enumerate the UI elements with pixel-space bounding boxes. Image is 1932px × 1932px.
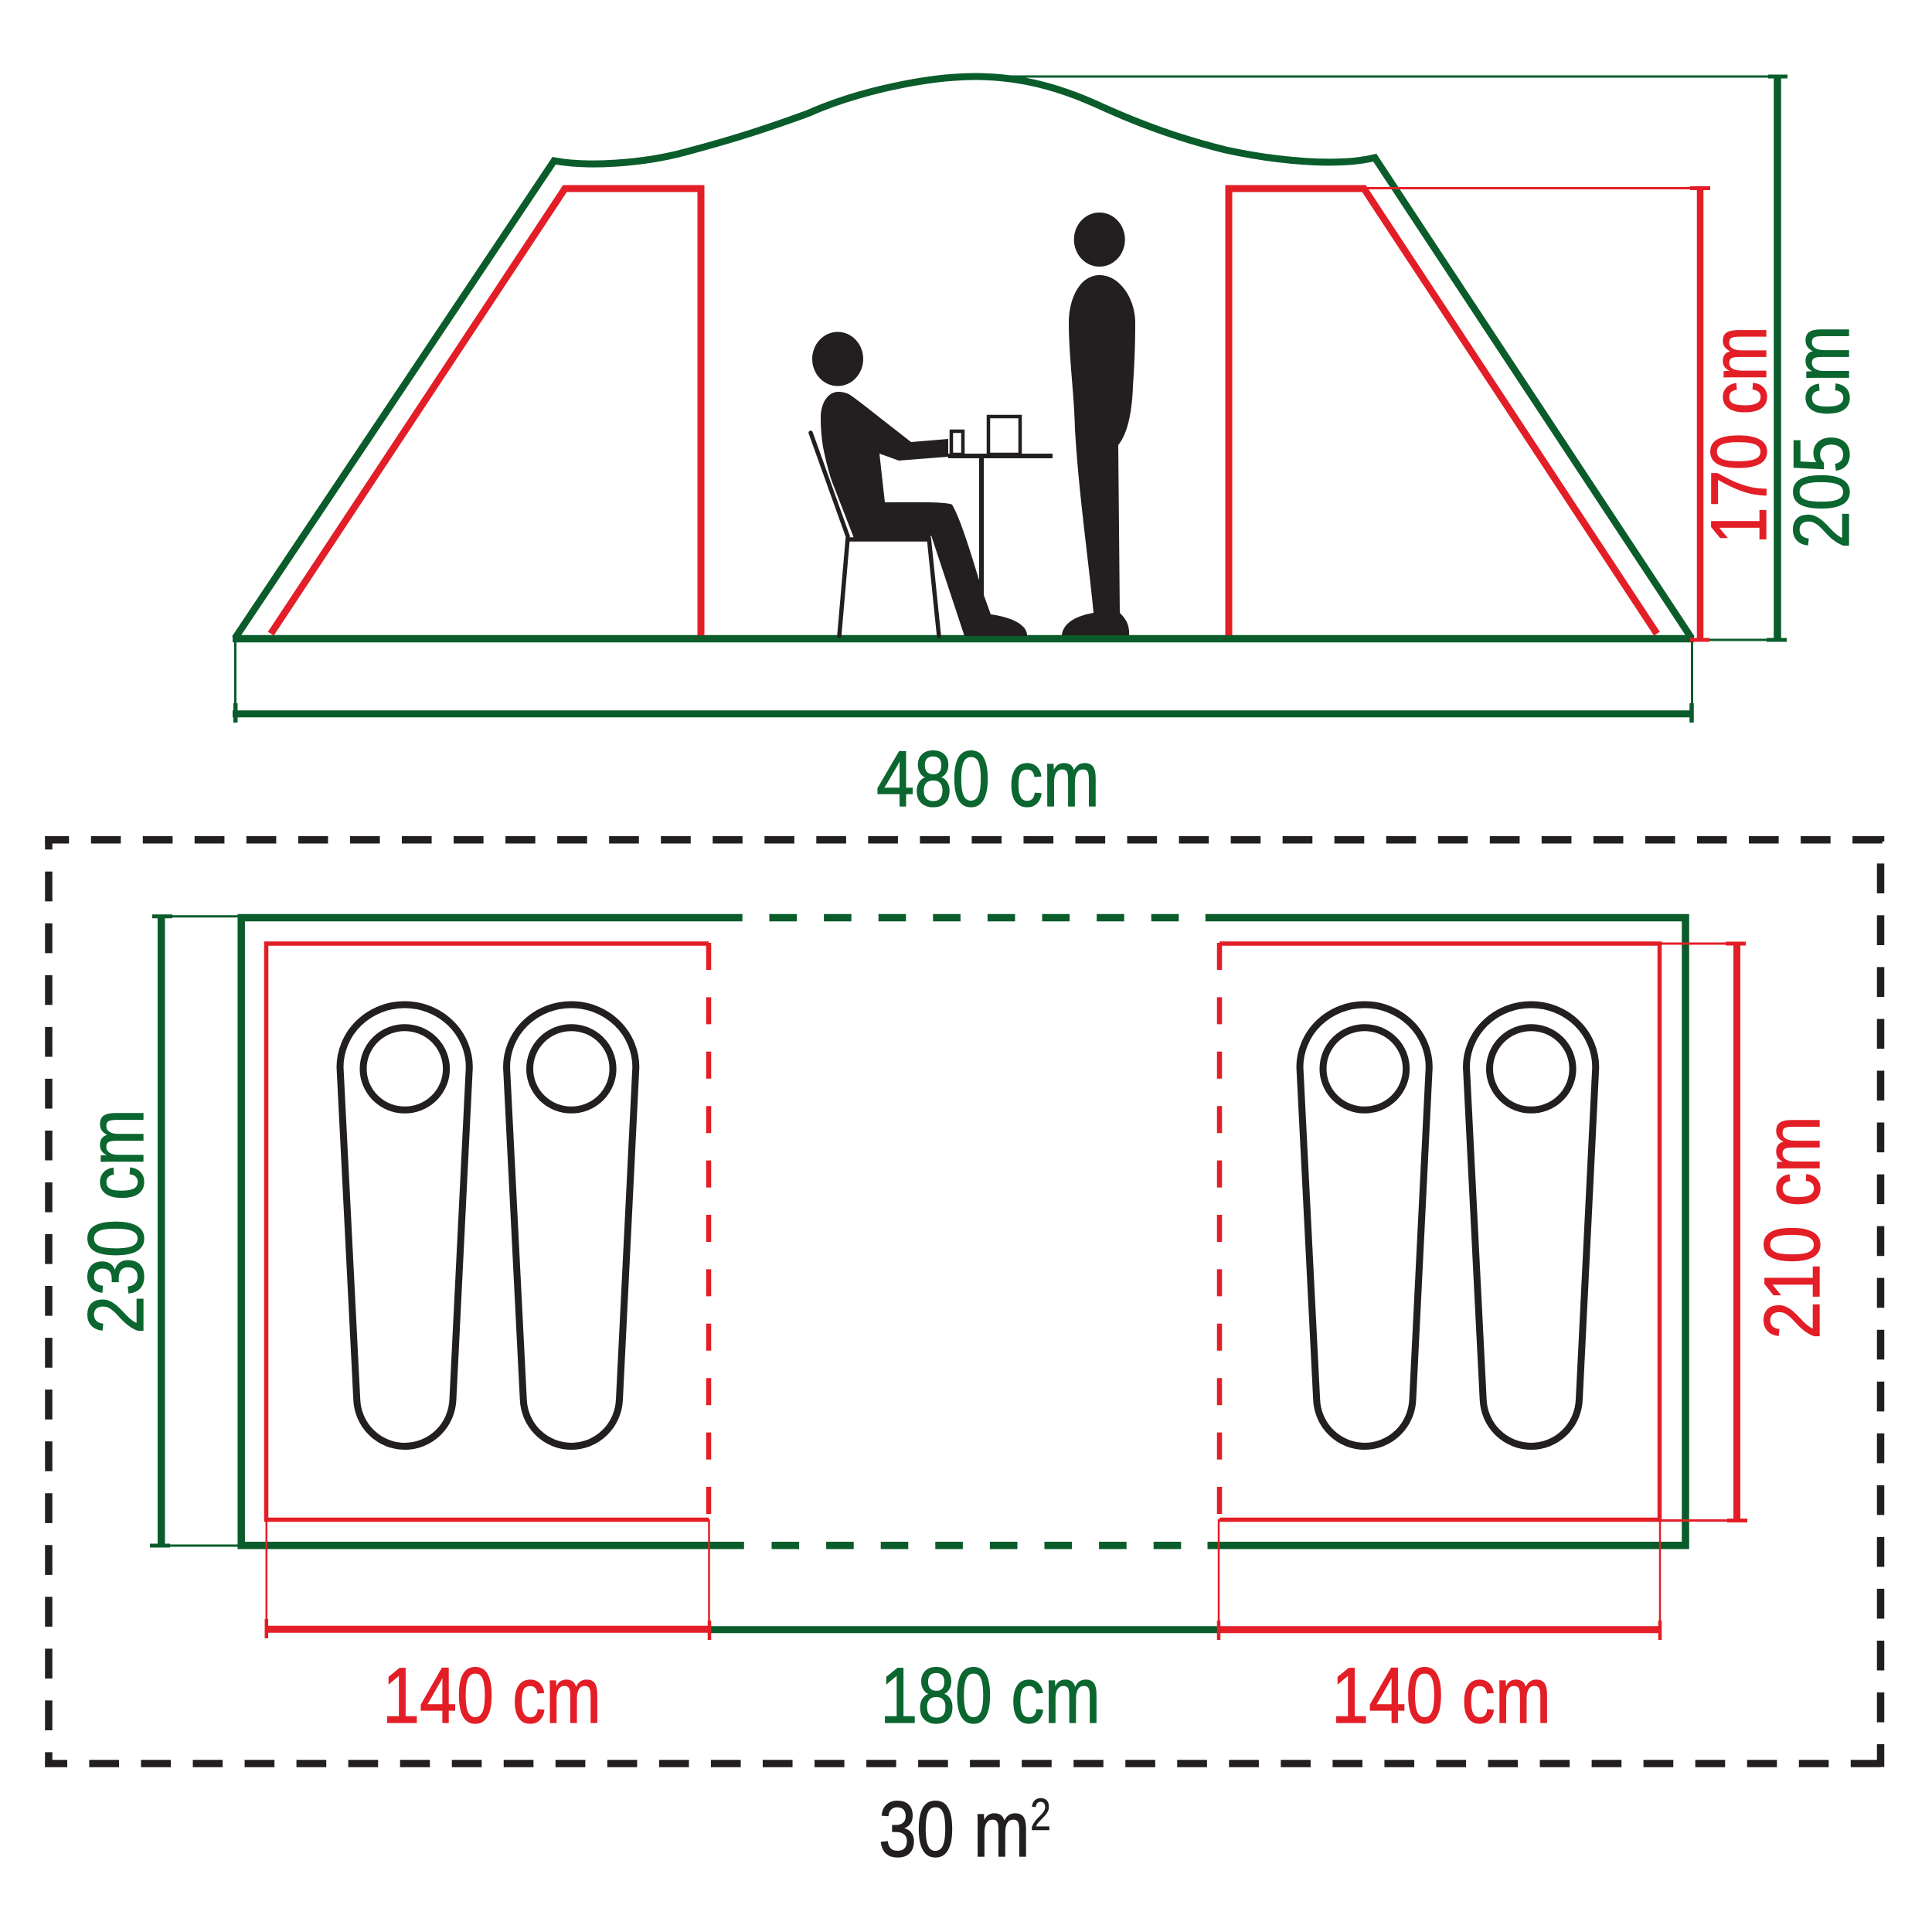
- 205 bar: [1774, 75, 1781, 641]
- dimension: 180 cm bar: [709, 1626, 1219, 1633]
- sleeping bag 2: [507, 1005, 636, 1446]
- panel: floor plan: [45, 836, 1884, 1873]
- label: 230 cm: 230 cm: [72, 1109, 160, 1334]
- box on table: [988, 417, 1020, 454]
- label: 30 m2 area: 2: [1030, 1790, 1051, 1840]
- width bar: [233, 710, 1693, 717]
- label: 30 m2 area: 30 m: [879, 1785, 1030, 1873]
- 170 end caps: [1690, 189, 1710, 640]
- gap between body and chair back: [816, 444, 852, 538]
- footprint dashed boundary: [45, 836, 1884, 1767]
- label: 140 cm right: 140 cm: [1332, 1651, 1551, 1740]
- 205 end caps: [1767, 77, 1787, 640]
- panel: side elevation: [233, 75, 1866, 823]
- width end ticks: [236, 703, 1692, 723]
- standing person: [1062, 213, 1135, 635]
- width extension lines: [235, 641, 1692, 723]
- cup on table: [951, 431, 963, 454]
- label: 170 cm: 170 cm: [1695, 326, 1783, 544]
- label: 480 cm: 480 cm: [876, 735, 1100, 823]
- 170 bar: [1697, 188, 1703, 640]
- dimension: 140 cm right: [1219, 1519, 1660, 1640]
- chair: [811, 433, 939, 636]
- seated person head: [812, 332, 863, 386]
- dimension: 210 cm: [1662, 944, 1747, 1521]
- table: [948, 456, 1053, 611]
- label: 205 cm: 205 cm: [1777, 325, 1866, 549]
- dimension: 480 cm width line: [233, 641, 1693, 723]
- inner room left outline: [266, 943, 709, 1519]
- inner room left: [270, 189, 701, 635]
- standing person head: [1074, 213, 1125, 267]
- 205 guides: [975, 77, 1770, 640]
- dimension: 205 cm height: [975, 75, 1787, 641]
- standing person body: [1062, 275, 1135, 635]
- label: 210 cm: 210 cm: [1748, 1116, 1836, 1339]
- seated person body: [821, 392, 1027, 636]
- sleeping bag 3: [1300, 1005, 1429, 1446]
- tent outer outline: [235, 77, 1692, 638]
- tent footprint outline: [241, 918, 1685, 1546]
- inner room right: [1229, 189, 1657, 635]
- dimension: 170 cm height: [1364, 188, 1710, 640]
- seated person and table: [811, 332, 1053, 636]
- inner room right outline: [1219, 943, 1660, 1519]
- dimension: 230 cm: [150, 917, 238, 1546]
- label: 140 cm left: 140 cm: [383, 1651, 601, 1740]
- label: 180 cm: 180 cm: [880, 1651, 1100, 1740]
- ground line: [233, 635, 1694, 642]
- 170 guide and caps: [1364, 189, 1710, 640]
- dimension: 140 cm left: [267, 1519, 711, 1640]
- sleeping bag 1: [340, 1005, 469, 1446]
- sleeping bag 4: [1467, 1005, 1596, 1446]
